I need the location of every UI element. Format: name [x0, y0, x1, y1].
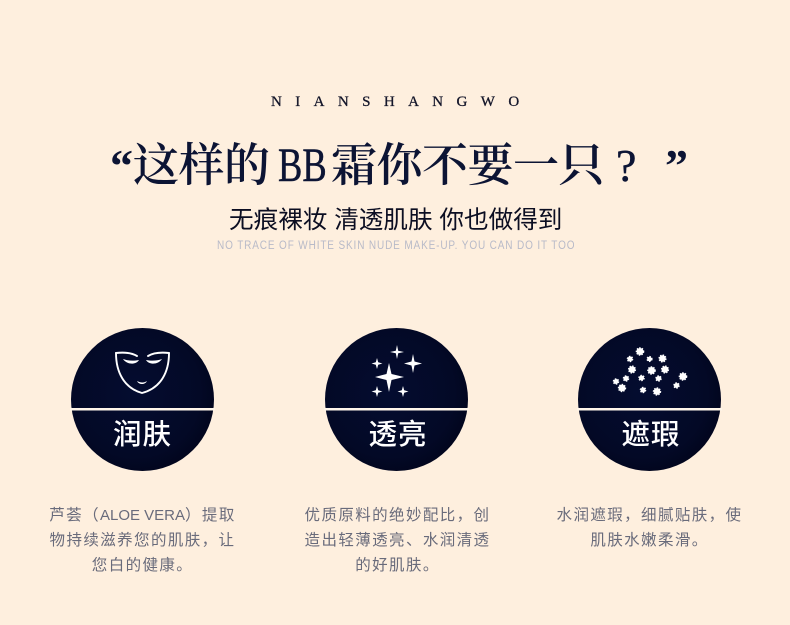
- label: 润肤: 润肤: [113, 419, 172, 451]
- text: 透亮 description: 优质原料的绝妙配比，创: [305, 507, 490, 524]
- icon: face: [116, 353, 169, 393]
- text: 透亮 description: 的好肌肤。: [355, 557, 440, 574]
- text: 透亮 description: [305, 506, 490, 574]
- text: 润肤 description: 芦荟（ALOE VERA）提取: [49, 507, 236, 524]
- label: 透亮: 透亮: [368, 419, 428, 451]
- text: 润肤 description: [49, 506, 236, 574]
- main title: [110, 139, 688, 192]
- text: 润肤 description: 您白的健康。: [92, 557, 193, 574]
- subtitle: 无痕裸妆 清透肌肤 你也做得到: [229, 207, 562, 234]
- badge: 润肤: [70, 328, 215, 471]
- main title: 这样的: [133, 140, 270, 191]
- badge: 遮瑕: [577, 328, 722, 471]
- main title: ?: [616, 140, 636, 191]
- label: 遮瑕: 遮瑕: [621, 419, 681, 451]
- text: 润肤 description: 物持续滋养您的肌肤，让: [50, 532, 235, 549]
- text: 透亮 description: 造出轻薄透亮、水润清透: [305, 532, 490, 549]
- main title: ”: [665, 140, 688, 191]
- English subtitle: NO TRACE OF WHITE SKIN NUDE MAKE-UP. YOU CAN DO IT TOO: [217, 240, 575, 252]
- brand name: NIANSHANGWO: [271, 94, 533, 110]
- main title: 霜你不要一只: [331, 140, 604, 191]
- text: 遮瑕 description: 肌肤水嫩柔滑。: [590, 532, 709, 549]
- text: 遮瑕 description: 水润遮瑕，细腻贴肤，使: [557, 507, 742, 524]
- main title: BB: [278, 139, 327, 192]
- text: 遮瑕 description: [557, 506, 742, 549]
- icon: dots: [614, 348, 686, 395]
- main title: “: [110, 140, 133, 191]
- icon: sparkles: [372, 345, 422, 397]
- badge: 透亮: [324, 328, 469, 471]
